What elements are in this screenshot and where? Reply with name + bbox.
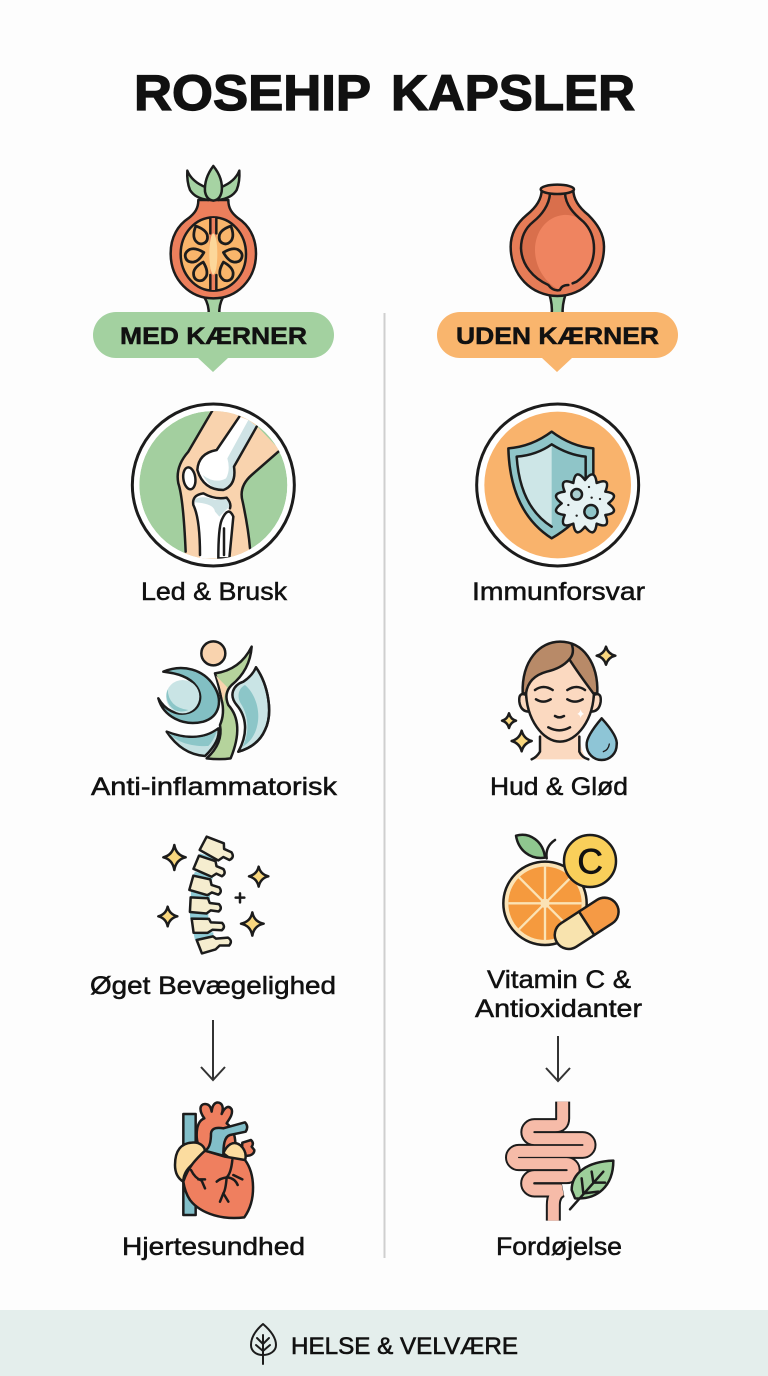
footer text: HELSE & VELVÆRE: [291, 1333, 518, 1360]
arrow: right column: [546, 1036, 570, 1081]
badge: med kaerner: [93, 312, 334, 372]
label: anti-inflammatorisk: Anti-inflammatorisk: [91, 773, 338, 801]
badge: med kaerner: MED KÆRNER: [120, 323, 307, 350]
icon: intestines with leaf: [512, 1102, 613, 1221]
label: vitamin C og antioxidanter: [475, 966, 642, 1023]
footer band: [0, 1310, 768, 1376]
badge: uden kaerner: UDEN KÆRNER: [456, 323, 659, 350]
icon: rosehip without seeds: [511, 185, 604, 315]
label: hjertesundhed: Hjertesundhed: [122, 1233, 305, 1261]
icon: knee joint: [132, 404, 294, 566]
label: oget bevaegelighed: Øget Bevægelighed: [90, 972, 336, 1000]
title: [134, 65, 635, 121]
label: fordojelse: Fordøjelse: [496, 1233, 622, 1261]
title: KAPSLER: [391, 65, 635, 121]
label: hud og glod: Hud & Glød: [490, 773, 628, 801]
label: vitamin C og antioxidanter: Antioxidanter: [475, 995, 642, 1023]
icon: anti-inflammatory figure: [158, 641, 269, 759]
icon: orange, vitamin C and capsule: [503, 835, 624, 954]
icon: footer leaf: [251, 1324, 276, 1364]
icon: rosehip with seeds: [171, 166, 256, 315]
icon: immune shield: [477, 404, 639, 566]
icon: heart: [175, 1102, 254, 1218]
arrow: left column: [201, 1020, 225, 1080]
badge: uden kaerner: [437, 312, 678, 372]
label: led og brusk: Led & Brusk: [141, 578, 288, 606]
label: immunforsvar: Immunforsvar: [472, 578, 645, 606]
icon: spine: [158, 836, 268, 954]
icon: face with glow: [502, 642, 617, 760]
label: vitamin C og antioxidanter: Vitamin C &: [487, 966, 631, 994]
title: ROSEHIP: [134, 65, 371, 121]
vitamin C letter: C: [577, 843, 603, 882]
